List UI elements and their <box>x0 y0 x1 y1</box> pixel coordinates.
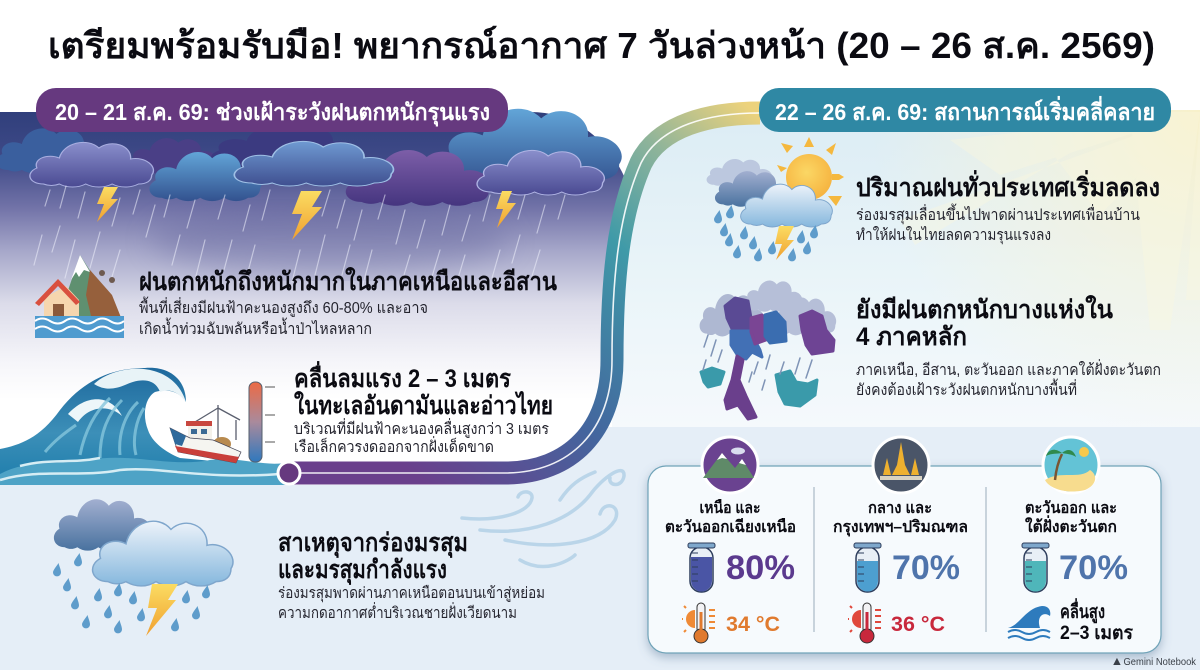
icon: map of Thailand with rain clouds <box>700 280 836 419</box>
icon: rain cloud with lightning <box>53 499 233 636</box>
text block: strong waves: เรือเล็กควรงดออกจากฝั่งเด็ดขาด <box>294 436 494 456</box>
icon: giant wave and fishing boat <box>0 368 290 485</box>
text block: cause of monsoon: และมรสุมกำลังแรง <box>278 556 447 586</box>
icon: lightning bolts <box>97 187 516 240</box>
text block: cause of monsoon: ความกดอากาศต่ำบริเวณชายฝั่งเวียดนาม <box>278 602 517 622</box>
column: central and Bangkok: 70% <box>892 549 960 587</box>
panel: improving period background <box>612 110 1200 427</box>
column: north and northeast: เหนือ และ <box>700 499 760 517</box>
text block: strong waves: คลื่นลมแรง 2 – 3 เมตร <box>294 361 511 393</box>
text block: heavy rain in four regions: ภาคเหนือ, อีสาน, ตะวันออก และภาคใต้ฝั่งตะวันตก <box>856 359 1161 379</box>
column: east and west coast of south: ตะวันออก และ <box>1025 499 1117 517</box>
panel: regional forecast card <box>648 437 1161 653</box>
text block: heavy rain in north and northeast: เกิดน้ำท่วมฉับพลันหรือน้ำป่าไหลหลาก <box>139 317 372 338</box>
icon: house, mountain and landslide <box>35 255 124 338</box>
heading pill: 22-26 Aug <box>759 88 1171 132</box>
text block: rainfall decreasing: ร่องมรสุมเลื่อนขึ้นไปพาดผ่านประเทศเพื่อนบ้าน <box>856 203 1140 225</box>
text block: heavy rain in north and northeast: ฝนตกหนักถึงหนักมากในภาคเหนือและอีสาน <box>139 266 557 296</box>
column: east and west coast of south: ใต้ฝั่งตะวันตก <box>1025 515 1117 536</box>
text block: heavy rain in four regions <box>856 294 1161 399</box>
text block: rainfall decreasing: ปริมาณฝนทั่วประเทศเริ่มลดลง <box>856 170 1160 202</box>
column: central and Bangkok <box>833 437 968 643</box>
icon: wave height gauge <box>249 382 275 462</box>
title: เตรียมพร้อมรับมือ! พยากรณ์อากาศ 7 วันล่วงหน้า (20 – 26 ส.ค. 2569) <box>48 25 1155 66</box>
icon: timeline dot <box>278 462 300 484</box>
column: north and northeast <box>665 437 796 643</box>
icon: sun behind rain clouds <box>707 137 844 261</box>
heading pill: 20-21 Aug <box>36 88 508 132</box>
text block: cause of monsoon: สาเหตุจากร่องมรสุม <box>278 529 468 559</box>
band: timeline connector <box>290 113 760 473</box>
text block: strong waves: บริเวณที่มีฝนฟ้าคะนองคลื่นสูงกว่า 3 เมตร <box>294 418 549 439</box>
heading pill: 22-26 Aug: 22 – 26 ส.ค. 69: สถานการณ์เริ่มคลี่คลาย <box>775 95 1155 125</box>
text block: heavy rain in north and northeast: พื้นที่เสี่ยงมีฝนฟ้าคะนองสูงถึง 60-80% และอาจ <box>139 296 428 318</box>
text block: rainfall decreasing <box>856 170 1160 245</box>
column: central and Bangkok: 36 °C <box>891 613 945 636</box>
column: east and west coast of south <box>1008 437 1134 644</box>
panel: storm period background <box>0 112 628 473</box>
heading pill: 20-21 Aug: 20 – 21 ส.ค. 69: ช่วงเฝ้าระวังฝนตกหนักรุนแรง <box>55 99 490 127</box>
column: central and Bangkok: กรุงเทพฯ–ปริมณฑล <box>833 518 968 537</box>
text block: heavy rain in four regions: 4 ภาคหลัก <box>856 323 967 351</box>
text block: cause of monsoon <box>278 529 545 622</box>
text block: rainfall decreasing: ทำให้ฝนในไทยลดความรุนแรงลง <box>856 226 1051 245</box>
text block: heavy rain in north and northeast <box>139 266 557 338</box>
rain streaks <box>34 186 565 288</box>
storm clouds <box>0 109 622 206</box>
column: east and west coast of south: คลื่นสูง <box>1060 598 1105 624</box>
column: north and northeast: 80% <box>726 549 795 587</box>
column: east and west coast of south: 70% <box>1059 549 1128 587</box>
icon: wind swirls <box>462 471 624 566</box>
text block: strong waves: ในทะเลอันดามันและอ่าวไทย <box>294 390 553 420</box>
text block: heavy rain in four regions: ยังมีฝนตกหนักบางแห่งใน <box>856 294 1113 324</box>
text block: heavy rain in four regions: ยังคงต้องเฝ้าระวังฝนตกหนักบางพื้นที่ <box>856 378 1077 399</box>
text block: strong waves <box>294 361 553 456</box>
text block: cause of monsoon: ร่องมรสุมพาดผ่านภาคเหนือตอนบนเข้าสู่หย่อม <box>278 584 545 603</box>
column: north and northeast: 34 °C <box>726 613 780 636</box>
column: central and Bangkok: กลาง และ <box>868 500 932 517</box>
column: north and northeast: ตะวันออกเฉียงเหนือ <box>665 517 796 536</box>
column: east and west coast of south: 2–3 เมตร <box>1060 623 1134 644</box>
